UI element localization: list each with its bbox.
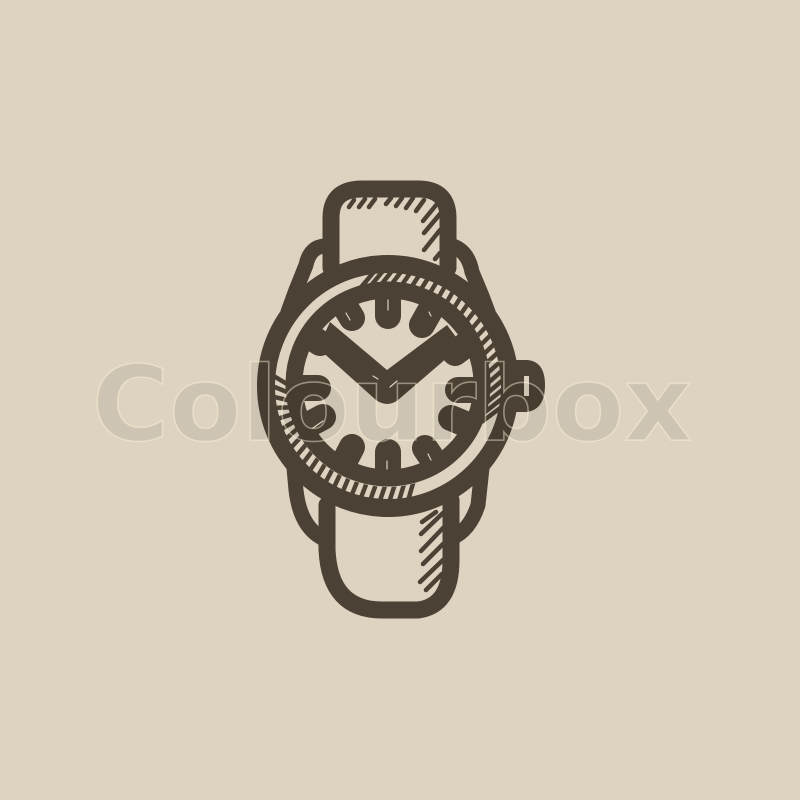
top strap — [331, 189, 448, 268]
bottom strap — [327, 500, 451, 610]
icon: watch — [266, 189, 545, 610]
strap lugs — [288, 245, 488, 538]
hour markers — [302, 298, 474, 470]
watermark text: Colourbox — [92, 345, 692, 465]
outer case ring — [266, 264, 510, 508]
illustration: wrist watch sketch icon with watermark — [96, 180, 692, 618]
dial highlights — [313, 300, 431, 469]
clock hands — [318, 322, 462, 404]
crown — [510, 360, 545, 412]
dial ring — [294, 290, 482, 478]
bezel hatching — [275, 273, 501, 499]
